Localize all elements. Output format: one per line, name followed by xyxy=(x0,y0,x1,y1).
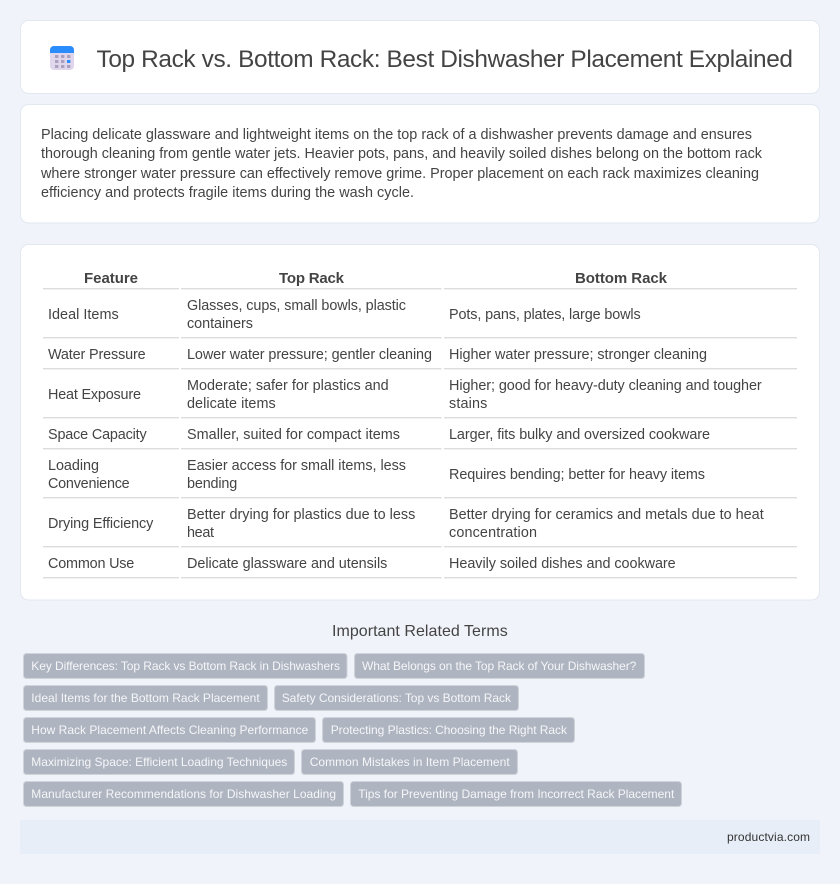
term chip xyxy=(302,750,518,774)
term chip: Common Mistakes in Item Placement xyxy=(310,755,510,769)
term chip: Maximizing Space: Efficient Loading Techniques xyxy=(31,755,287,769)
table header row: Feature xyxy=(84,270,138,287)
term chip xyxy=(24,686,268,710)
row: loading convenience: Requires bending; better for heavy items xyxy=(449,467,705,483)
term chip: Protecting Plastics: Choosing the Right Rack xyxy=(331,723,568,737)
row: drying efficiency: Drying Efficiency xyxy=(48,516,154,532)
row: ideal items: Pots, pans, plates, large bowls xyxy=(449,307,641,323)
row: ideal items xyxy=(48,298,641,332)
row: heat exposure: delicate items xyxy=(187,396,276,412)
term chip xyxy=(24,782,344,806)
term chip: Tips for Preventing Damage from Incorrect Rack Placement xyxy=(358,787,675,801)
row: heat exposure: Higher; good for heavy-duty cleaning and tougher xyxy=(449,378,762,394)
row: loading convenience: bending xyxy=(187,476,237,492)
row: drying efficiency: concentration xyxy=(449,525,537,541)
row: loading convenience xyxy=(48,458,705,492)
row: heat exposure: stains xyxy=(449,396,487,412)
row: drying efficiency: Better drying for plastics due to less xyxy=(187,507,415,523)
icon: calendar xyxy=(50,46,74,70)
table header row: Top Rack xyxy=(279,270,345,287)
term chip xyxy=(24,718,316,742)
term chip: Key Differences: Top Rack vs Bottom Rack in Dishwashers xyxy=(31,659,340,673)
title: Top Rack vs. Bottom Rack: Best Dishwasher Placement Explained xyxy=(96,46,793,73)
panel: comparison table xyxy=(20,244,820,600)
row: water pressure: Higher water pressure; stronger cleaning xyxy=(449,347,707,363)
row: common use xyxy=(48,556,676,572)
row: ideal items: Ideal Items xyxy=(48,307,119,323)
intro text: efficiency and protects fragile items during the wash cycle. xyxy=(41,185,414,201)
related terms heading: Important Related Terms xyxy=(332,623,508,640)
term chip: How Rack Placement Affects Cleaning Performance xyxy=(31,723,309,737)
term chip xyxy=(24,654,347,678)
row: water pressure: Lower water pressure; gentler cleaning xyxy=(187,347,432,363)
row: ideal items: Glasses, cups, small bowls, plastic xyxy=(187,298,406,314)
row: loading convenience: Loading xyxy=(48,458,99,474)
row: drying efficiency: Better drying for ceramics and metals due to heat xyxy=(449,507,764,523)
term chip: What Belongs on the Top Rack of Your Dishwasher? xyxy=(362,659,637,673)
term chip xyxy=(24,750,294,774)
row: space capacity: Smaller, suited for compact items xyxy=(187,427,400,443)
term chip: Safety Considerations: Top vs Bottom Rack xyxy=(282,691,512,705)
table header row: Bottom Rack xyxy=(575,270,668,287)
row: heat exposure: Moderate; safer for plastics and xyxy=(187,378,389,394)
intro text xyxy=(40,127,763,201)
table header row xyxy=(84,270,668,287)
row: loading convenience: Easier access for small items, less xyxy=(187,458,406,474)
intro text: Placing delicate glassware and lightweight items on the top rack of a dishwasher prevents damage and ensures xyxy=(41,127,752,143)
term chip xyxy=(322,718,574,742)
row: heat exposure: Heat Exposure xyxy=(48,387,141,403)
footer source: productvia.com xyxy=(727,830,810,844)
row: drying efficiency: heat xyxy=(187,525,214,541)
row: drying efficiency xyxy=(48,507,764,541)
panel: important related terms xyxy=(24,623,682,806)
row: loading convenience: Convenience xyxy=(48,476,130,492)
row: space capacity xyxy=(48,427,710,443)
row: common use: Delicate glassware and utensils xyxy=(187,556,387,572)
panel: introduction xyxy=(20,104,820,223)
row: heat exposure xyxy=(48,378,762,412)
row: water pressure xyxy=(48,347,707,363)
footer bar xyxy=(20,820,820,854)
row: space capacity: Space Capacity xyxy=(48,427,147,443)
intro text: thorough cleaning from gentle water jets. Heavier pots, pans, and heavily soiled dishes belong on the bottom rack xyxy=(41,146,763,162)
panel: header xyxy=(20,20,820,94)
term chip xyxy=(350,782,682,806)
row: common use: Heavily soiled dishes and cookware xyxy=(449,556,676,572)
term chip: Ideal Items for the Bottom Rack Placement xyxy=(31,691,260,705)
intro text: where stronger water pressure can effectively remove grime. Proper placement on each rack maximizes cleaning xyxy=(40,166,759,182)
term chip xyxy=(274,686,518,710)
row: ideal items: containers xyxy=(187,316,253,332)
row: space capacity: Larger, fits bulky and oversized cookware xyxy=(449,427,710,443)
row: common use: Common Use xyxy=(48,556,134,572)
term chip xyxy=(354,654,644,678)
term chip: Manufacturer Recommendations for Dishwasher Loading xyxy=(31,787,336,801)
row: water pressure: Water Pressure xyxy=(48,347,146,363)
